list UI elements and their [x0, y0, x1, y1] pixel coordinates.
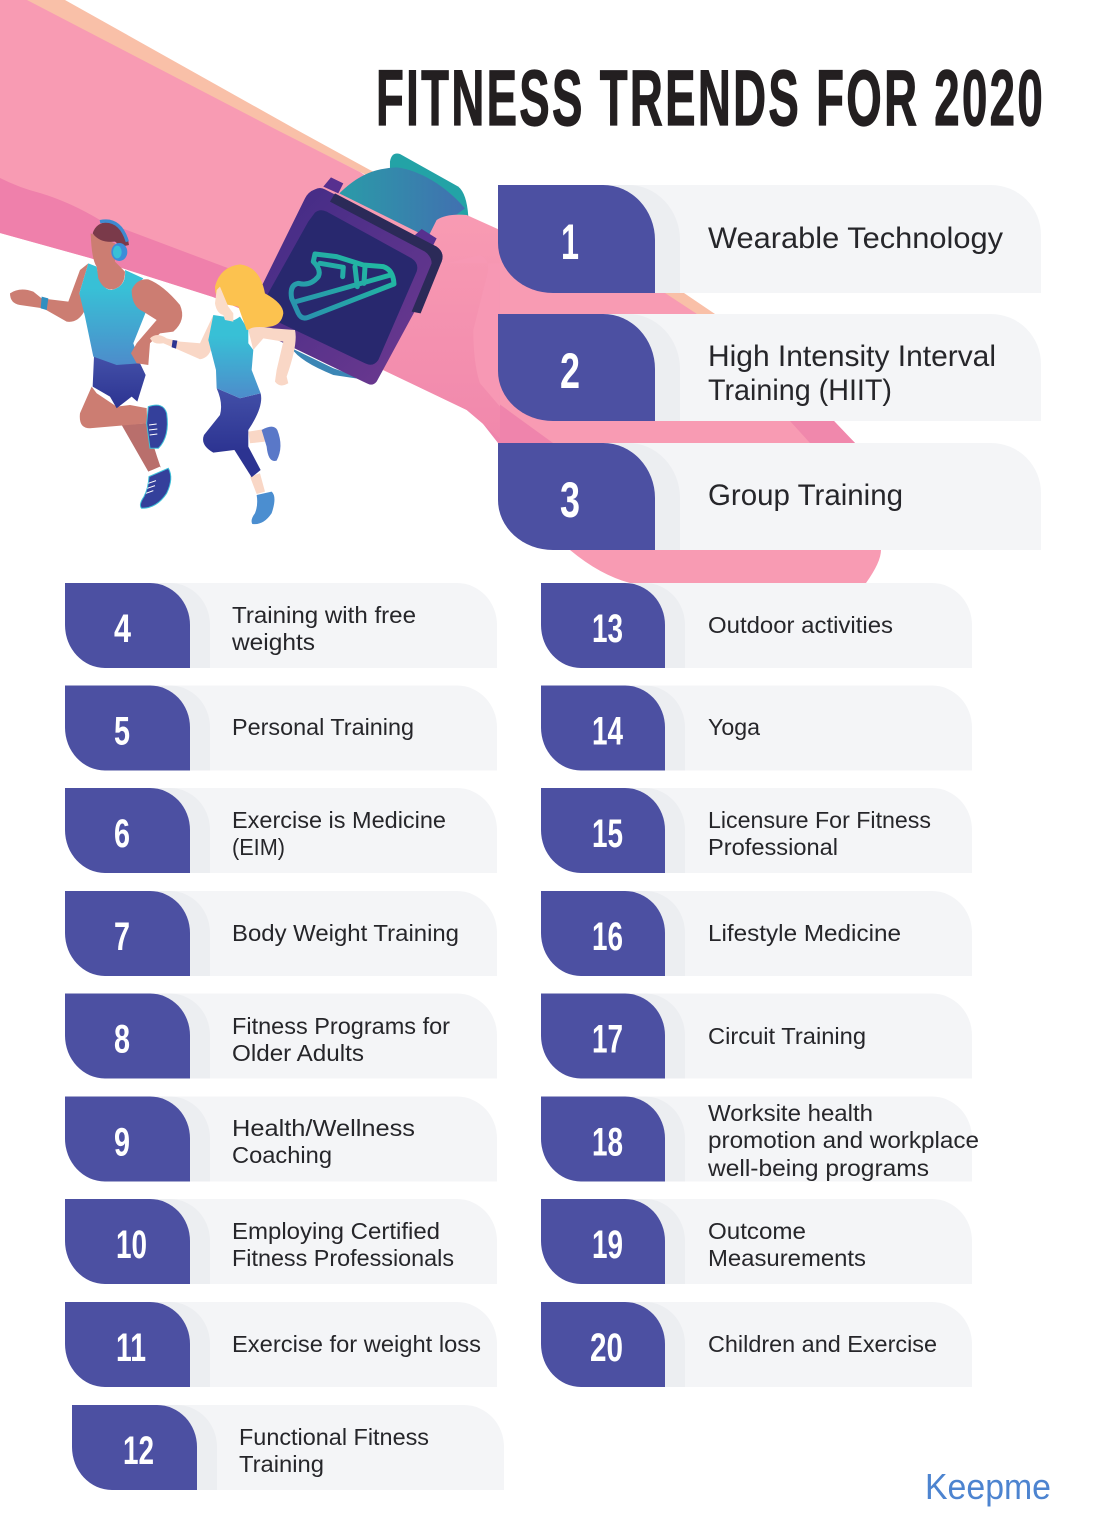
trend 3: 3: [560, 472, 580, 528]
trend 20: [541, 1302, 972, 1387]
trend 15: [541, 788, 972, 873]
trend 1: Wearable Technology: [708, 222, 1003, 255]
trend 11: Exercise for weight loss: [232, 1331, 481, 1357]
trend 5: [65, 686, 497, 770]
illustration: arm with smartwatch: [0, 0, 881, 583]
trend 7: [65, 891, 497, 976]
trend 19: 19: [592, 1223, 623, 1267]
trend 10: Employing Certified: [232, 1218, 440, 1244]
trend 14: Yoga: [708, 714, 760, 740]
trend 17: 17: [592, 1018, 623, 1062]
logo: Keepme: Keepme: [925, 1466, 1051, 1507]
trend 20: 20: [590, 1326, 623, 1370]
trend 2: High Intensity Interval: [708, 340, 996, 373]
trend 19: Measurements: [708, 1245, 866, 1271]
trend 18: Worksite health: [708, 1100, 873, 1126]
trend 5: Personal Training: [232, 714, 414, 740]
illustration: male runner: [10, 221, 182, 508]
trend 4: [65, 583, 497, 668]
trend 3: Group Training: [708, 479, 903, 512]
trend 11: [65, 1302, 497, 1387]
trend 16: Lifestyle Medicine: [708, 920, 901, 946]
trend 2: 2: [560, 343, 580, 399]
trend 6: (EIM): [232, 834, 285, 860]
trend 2: Training (HIIT): [708, 374, 892, 407]
trend 6: [65, 788, 497, 873]
trend 11: 11: [116, 1326, 146, 1370]
trend 13: [541, 583, 972, 668]
trend 18: 18: [592, 1120, 623, 1164]
trend 8: Fitness Programs for: [232, 1013, 450, 1039]
trend 19: [541, 1199, 972, 1284]
trend 18: [541, 1096, 979, 1182]
trend 18: well-being programs: [707, 1155, 929, 1181]
trend 17: Circuit Training: [708, 1023, 866, 1049]
trend 15: Licensure For Fitness: [708, 807, 931, 833]
trend 17: [541, 994, 972, 1078]
trend 13: 13: [592, 607, 623, 651]
trend 14: 14: [592, 710, 624, 754]
trend 12: Functional Fitness: [239, 1424, 429, 1450]
trend 7: Body Weight Training: [232, 920, 459, 946]
trend 9: 9: [114, 1120, 130, 1164]
trend 4: Training with free: [232, 602, 416, 628]
trend 1: 1: [561, 214, 579, 270]
trend 20: Children and Exercise: [708, 1331, 937, 1357]
trend 8: [65, 994, 497, 1078]
trend 9: Health/Wellness: [232, 1115, 415, 1141]
trend 10: Fitness Professionals: [232, 1245, 454, 1271]
trend 6: 6: [114, 812, 130, 856]
trend 12: [72, 1405, 504, 1490]
trend 15: Professional: [708, 834, 838, 860]
trend 12: 12: [123, 1429, 154, 1473]
trend 6: Exercise is Medicine: [232, 807, 446, 833]
trend 16: 16: [592, 915, 623, 959]
trend 8: Older Adults: [232, 1040, 364, 1066]
icon: running shoe: [291, 254, 394, 318]
trend 16: [541, 891, 972, 976]
trend 13: Outdoor activities: [708, 612, 893, 638]
trend 19: Outcome: [708, 1218, 806, 1244]
trend 2: [498, 314, 1041, 421]
trend 8: 8: [114, 1018, 130, 1062]
trend 9: Coaching: [232, 1142, 332, 1168]
trend 18: promotion and workplace: [708, 1127, 979, 1153]
trend 15: 15: [592, 812, 623, 856]
illustration: female runner: [150, 264, 296, 524]
trend 12: Training: [239, 1451, 324, 1477]
trend 14: [541, 686, 972, 770]
trend 5: 5: [114, 710, 130, 754]
trend 7: 7: [114, 915, 130, 959]
smartwatch: [246, 154, 500, 438]
trend 9: [65, 1096, 497, 1182]
trend 1: [498, 185, 1041, 293]
trend 4: 4: [114, 607, 132, 651]
trend 10: 10: [116, 1223, 147, 1267]
trend 3: [498, 443, 1041, 550]
trend 10: [65, 1199, 497, 1284]
trend 4: weights: [231, 629, 315, 655]
